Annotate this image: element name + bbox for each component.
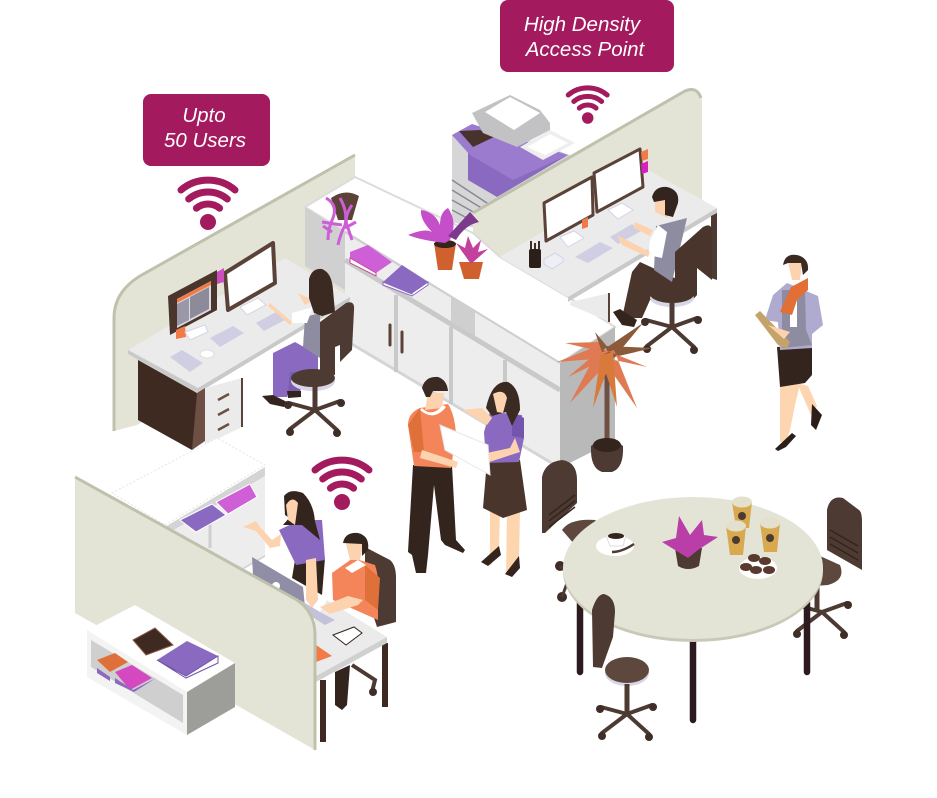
lower white side table	[87, 605, 235, 735]
callout: high density access point: Access Point	[524, 38, 646, 61]
potted palm	[557, 323, 653, 472]
round table chair front	[592, 594, 657, 741]
right monitors	[544, 149, 648, 247]
standing woman	[440, 382, 527, 577]
walking woman with clipboard	[755, 255, 823, 451]
left desk	[128, 258, 350, 450]
standing woman lower desk	[243, 491, 325, 608]
right desk accessories	[529, 224, 641, 269]
counter plants	[408, 208, 488, 279]
wifi icon: access point	[568, 88, 607, 124]
right office chair	[641, 225, 712, 354]
wifi icon: upto 50 users	[181, 180, 235, 230]
lower cubicle partition	[75, 477, 315, 750]
left desk keyboards and phone	[170, 312, 285, 372]
callout: high density access point: High Density	[524, 13, 642, 36]
cookie plate	[739, 554, 777, 579]
table plant	[662, 516, 718, 569]
left monitors	[168, 243, 275, 340]
printer	[452, 95, 575, 240]
callout: upto 50 users: 50 Users	[164, 129, 246, 152]
lower shelf unit	[112, 438, 265, 580]
coffee saucer	[596, 533, 634, 556]
counter side panel	[305, 207, 345, 290]
right cubicle partition	[473, 89, 702, 290]
left office chair	[284, 302, 354, 437]
callout: upto 50 users: Upto	[182, 104, 226, 127]
books on shelf	[350, 245, 428, 296]
seated woman left desk	[262, 269, 335, 407]
round table chair right	[791, 498, 862, 639]
laptop	[252, 557, 335, 625]
round table	[563, 497, 823, 720]
callout: upto 50 users	[143, 94, 270, 166]
lower chair back	[365, 547, 396, 627]
seated man right desk	[613, 187, 690, 327]
callout: high density access point	[500, 0, 674, 72]
right desk	[500, 170, 717, 322]
wifi icon: lower cubicle	[315, 460, 369, 510]
round table chair left	[542, 460, 596, 602]
left cubicle partition	[114, 155, 355, 431]
cabinets	[345, 232, 615, 468]
coffee cups	[726, 496, 780, 555]
white counter top	[305, 177, 615, 363]
lower desk	[315, 600, 387, 742]
hanging plant	[322, 192, 359, 245]
seated man lower desk	[320, 533, 380, 620]
standing man	[408, 377, 465, 573]
